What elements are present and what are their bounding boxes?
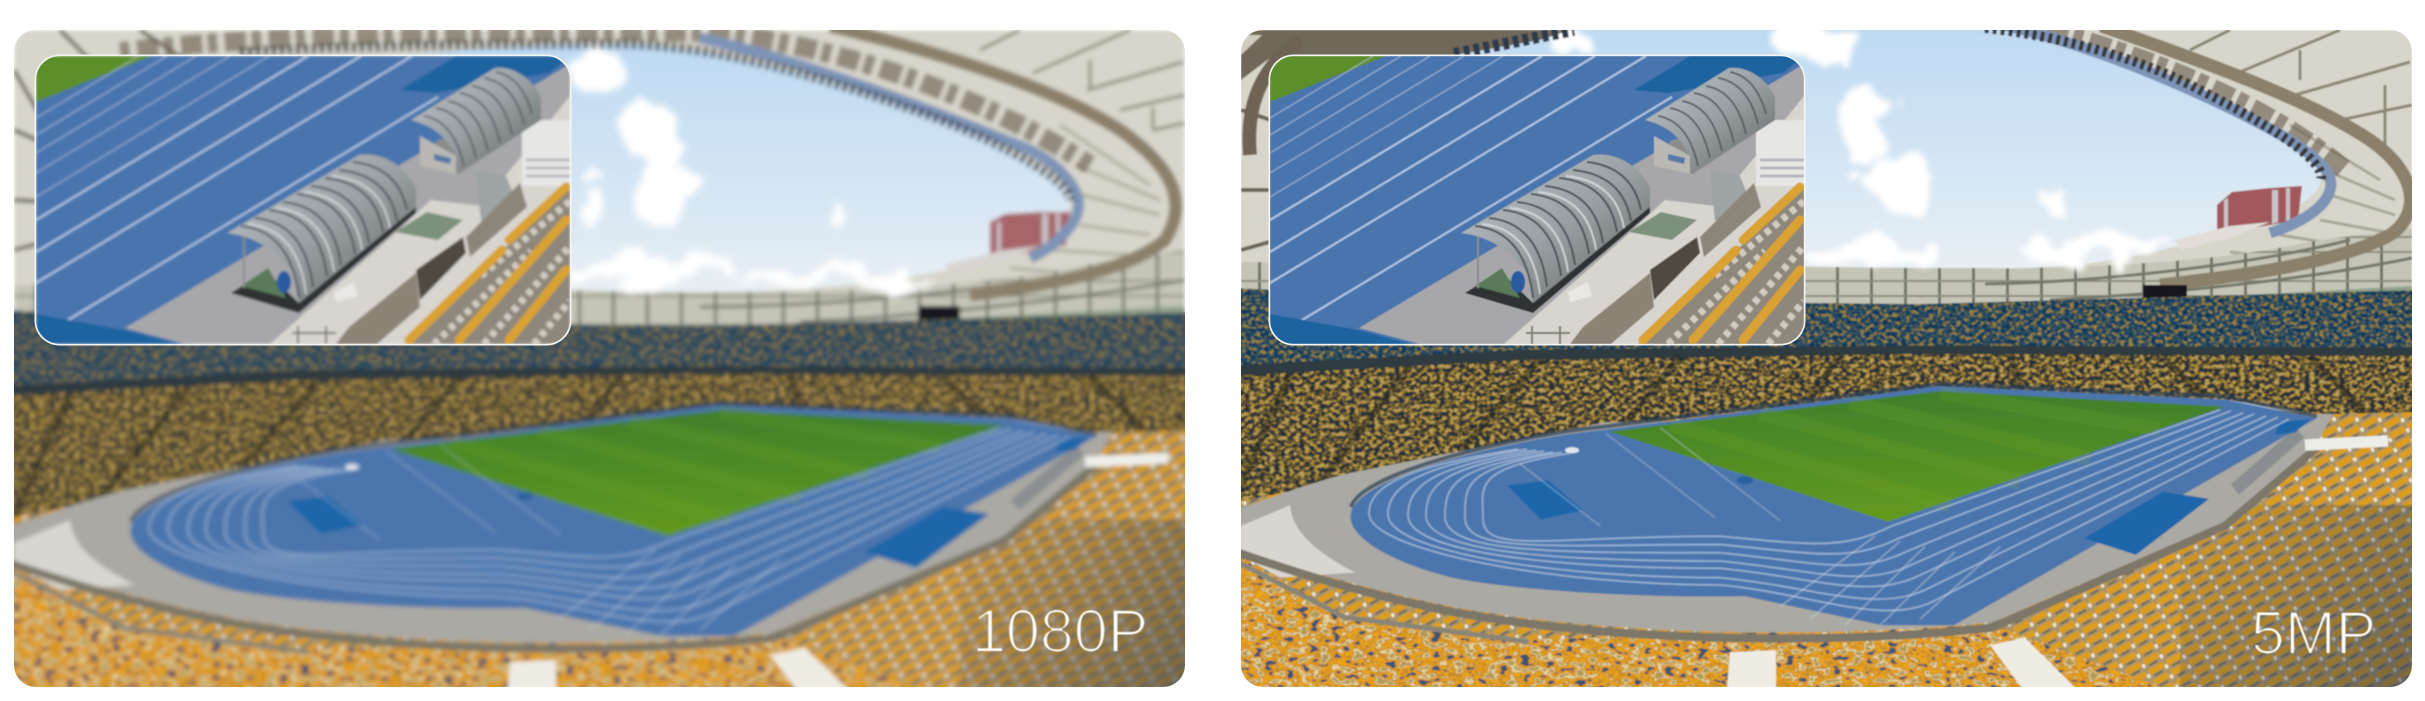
close-up inset [1268,54,1806,346]
label: 1080P: 1080P [972,597,1148,665]
steel ring with teeth [1990,22,2331,233]
panel: 1080P stadium view [0,26,1210,701]
scoreboard [2142,284,2188,299]
label: 5MP: 5MP [2251,599,2376,667]
close-up inset [34,54,572,346]
building [2217,186,2302,232]
stadium photo, sharp 5MP [1220,20,2425,701]
scoreboard [918,306,960,327]
steel ring with teeth [700,38,1078,258]
clouds [560,46,920,285]
stadium photo, blurred 1080P [0,26,1210,701]
seating bowl, track and pitch [1220,288,2425,701]
roof canopy [14,30,1185,330]
top-left ring structure [1241,30,1570,80]
sky [1460,30,2322,270]
outer ring beam [830,26,1176,295]
sky [402,42,1072,294]
outer ring beam [2101,26,2410,285]
panel: 5MP stadium view [1220,20,2425,701]
building [990,212,1070,258]
clouds [1555,20,2170,267]
seating bowl, track and pitch [0,310,1210,701]
truss [120,32,1090,165]
truss [2030,26,2345,170]
roof canopy [1241,30,2412,310]
